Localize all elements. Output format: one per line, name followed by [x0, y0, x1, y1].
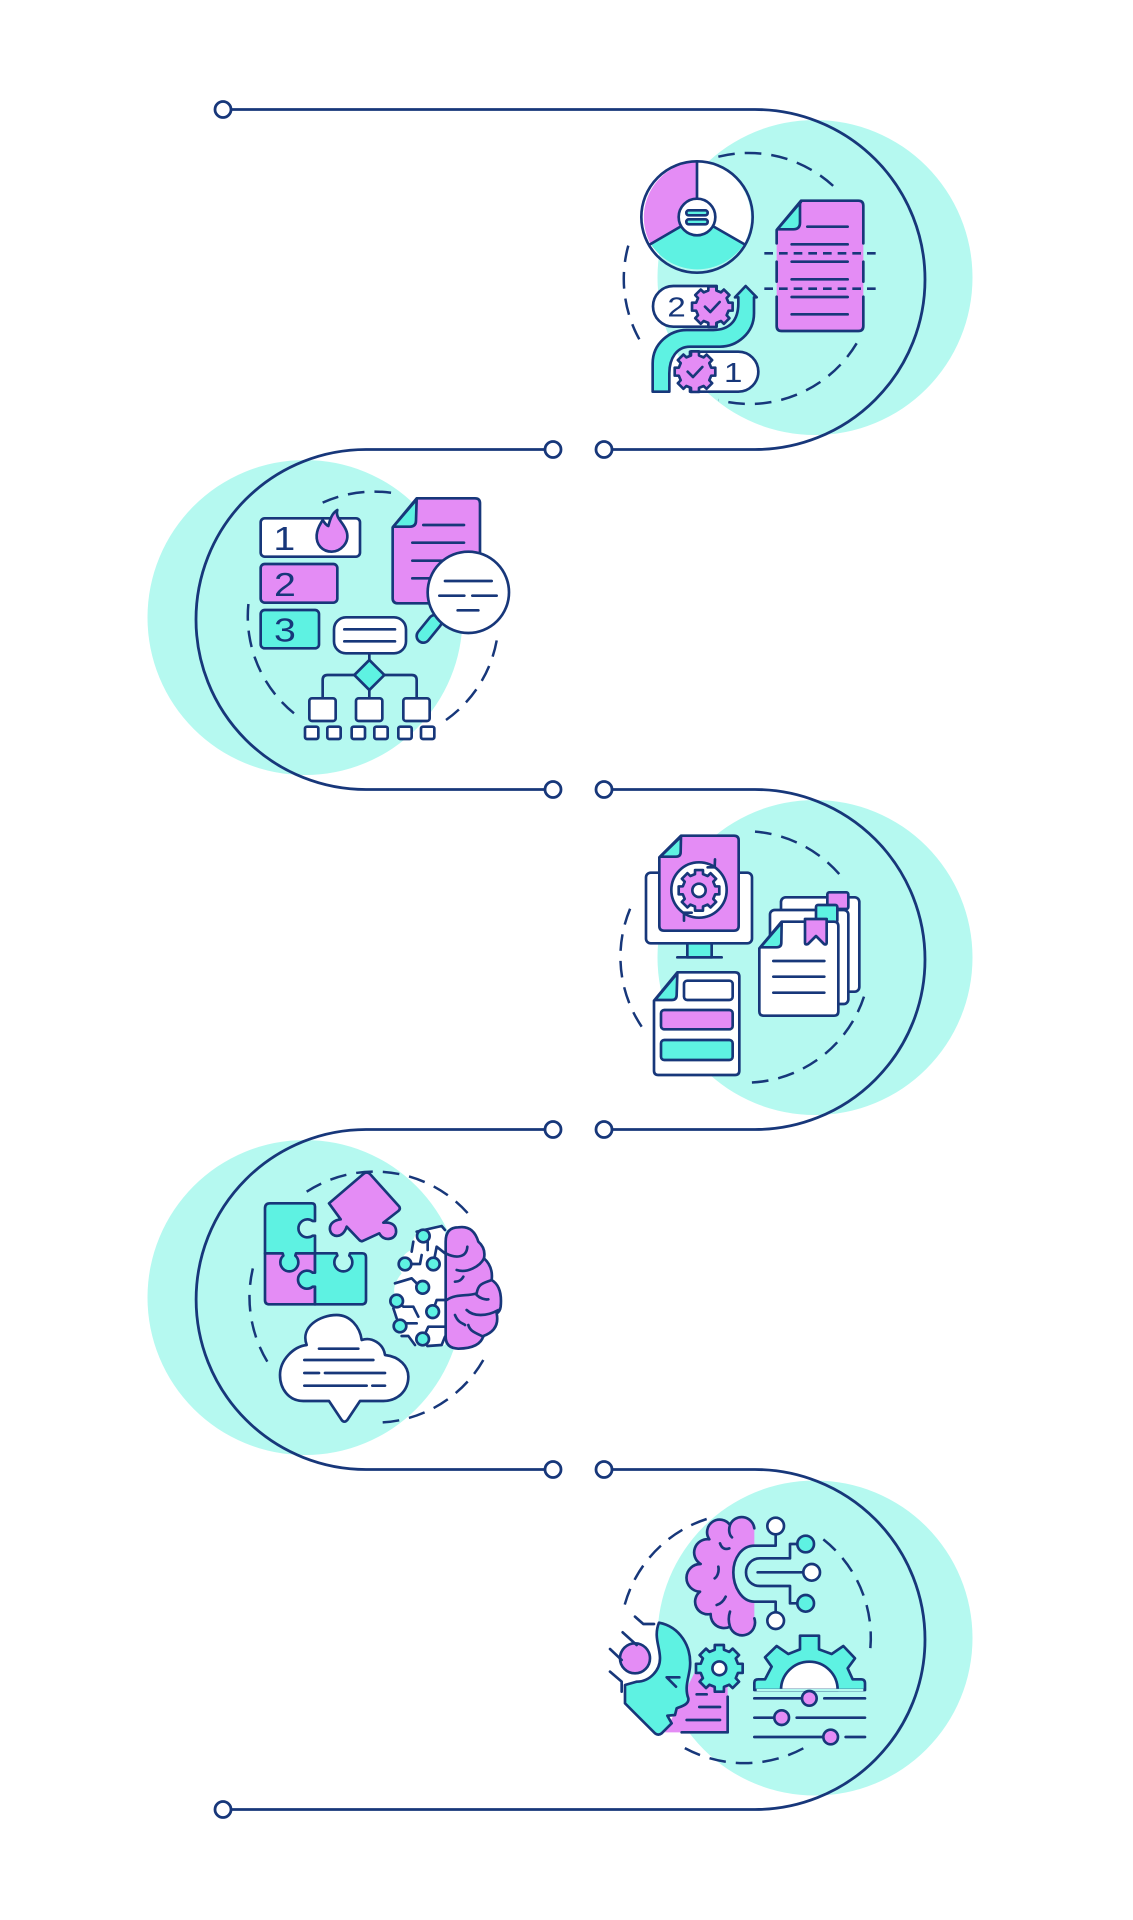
timeline connector: [196, 102, 925, 1818]
icon: document with gear: [659, 836, 739, 931]
icon: gear check 1: [675, 351, 715, 392]
icon group: step 3 monitor and documents: [620, 832, 864, 1083]
priority row 1: [261, 510, 360, 557]
icon group: step 2 priorities, document and flowchart: [248, 492, 509, 739]
icon: gear check 2: [692, 286, 733, 327]
icon: AI head profile: [610, 1617, 690, 1735]
icon: document with dashed cut lines: [764, 201, 876, 331]
icon: magnifying glass: [423, 552, 509, 636]
icon: document behind head: [665, 1672, 728, 1732]
dashed ring: [248, 492, 498, 720]
priority row 3: [261, 610, 319, 649]
icon group: step 4 puzzle, brain and cloud: [249, 1172, 501, 1423]
icon group: step 5 AI brain, gears and head: [610, 1517, 871, 1763]
background disc: step 5: [658, 1480, 972, 1796]
icon group: step 1 pie, document and process: [624, 153, 876, 404]
icon: monitor: [646, 873, 752, 957]
dashed ring: [249, 1172, 483, 1423]
background disc: step 2: [148, 460, 462, 775]
icon: step pill 2: [653, 286, 717, 327]
icon: form document: [654, 972, 739, 1075]
dashed ring: [623, 1519, 871, 1763]
icon: half circuit half organic brain: [390, 1226, 501, 1349]
priority row 1: 1: [273, 520, 295, 557]
dashed ring: [620, 832, 864, 1083]
icon: stacked documents with bookmarks: [759, 892, 859, 1016]
icon: assembled puzzle: [265, 1203, 366, 1304]
dashed ring: [624, 153, 857, 404]
icon: pie chart: [641, 161, 753, 273]
background disc: step 3: [658, 800, 972, 1115]
icon: step pill 2: 2: [667, 292, 686, 323]
priority row 2: [261, 564, 337, 603]
icon: document: [393, 498, 480, 603]
priority row 3: 3: [274, 611, 296, 649]
icon: half gear with sliders: [754, 1636, 865, 1744]
background disc: step 1: [658, 120, 972, 435]
icon: step pill 1: 1: [724, 357, 742, 388]
icon: loose puzzle piece: [329, 1172, 400, 1241]
icon: small gear: [696, 1645, 743, 1692]
icon: curved arrow: [653, 286, 757, 392]
icon: flowchart: [305, 617, 434, 739]
background disc: step 4: [148, 1140, 462, 1455]
icon: step pill 1: [690, 352, 758, 392]
priority row 2: 2: [274, 566, 296, 603]
icon: brain with connectors: [687, 1517, 820, 1635]
icon: cloud speech bubble: [280, 1315, 408, 1422]
